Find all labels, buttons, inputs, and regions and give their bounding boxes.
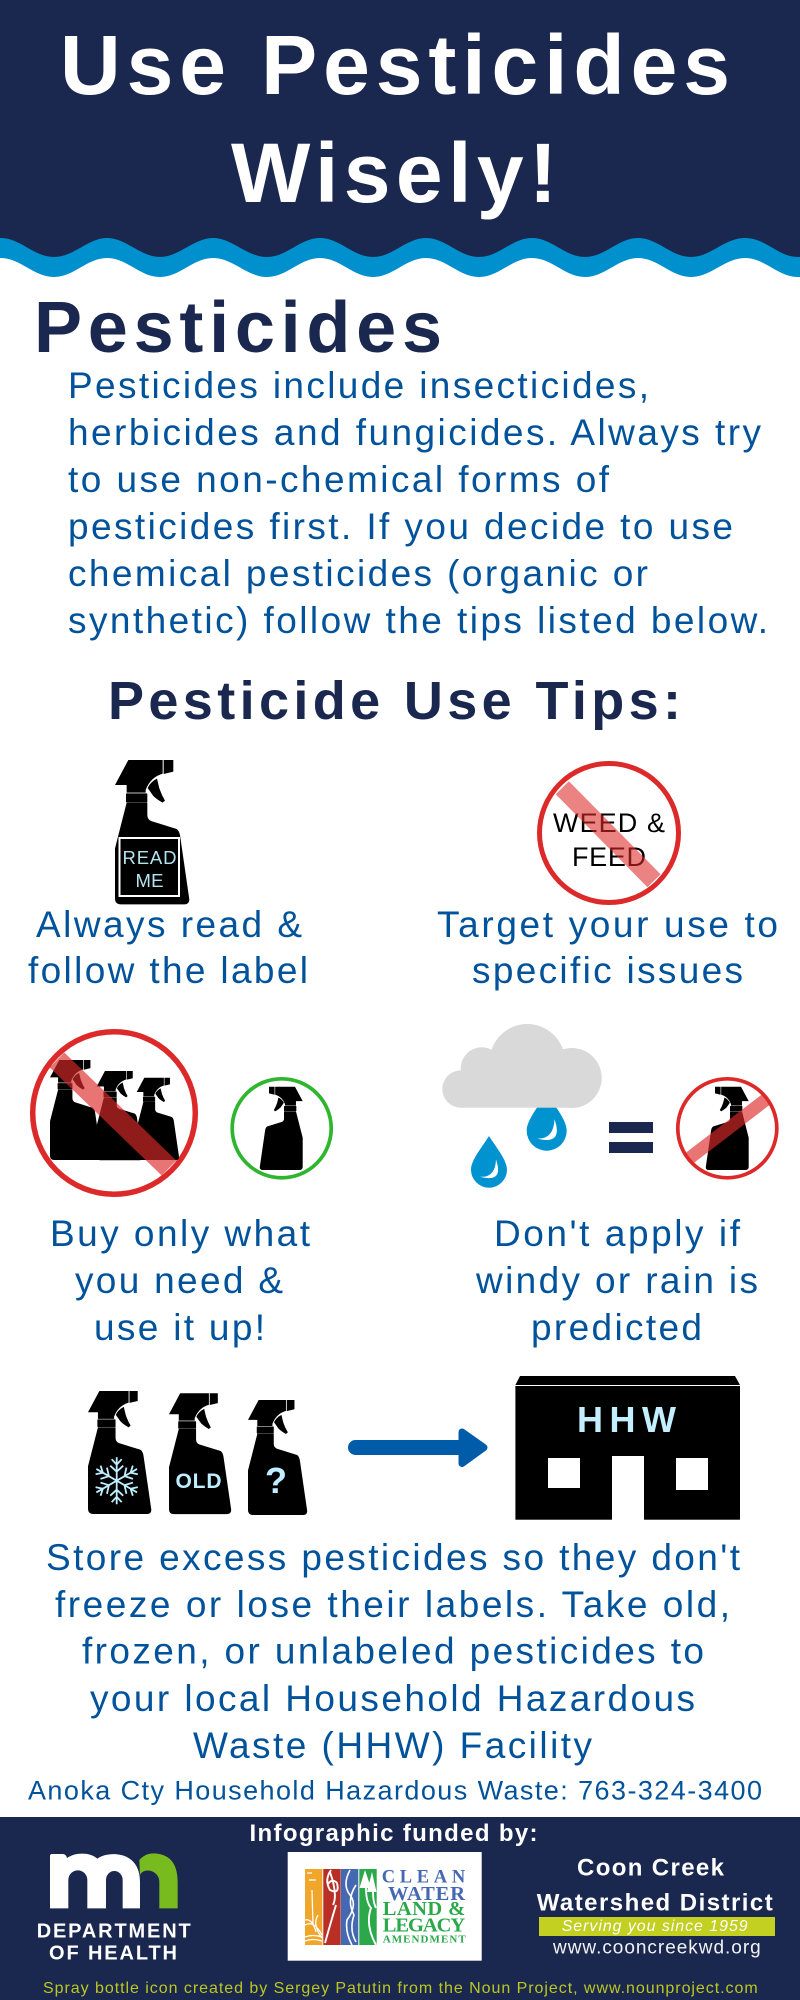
icon: old bottle	[169, 1393, 231, 1514]
intro paragraph: pesticides first. If you decide to use	[68, 506, 733, 547]
storage paragraph: Waste (HHW) Facility	[193, 1725, 592, 1766]
caption: you need &	[75, 1260, 283, 1301]
icon: rain cloud	[442, 1024, 602, 1188]
logo wordmark: WATER	[388, 1883, 465, 1905]
intro paragraph: herbicides and fungicides. Always try	[68, 412, 762, 453]
cloud shape	[442, 1024, 602, 1108]
tip 4: don't apply if windy or rainy	[442, 1024, 777, 1348]
icon: HHW building: HHW	[577, 1399, 676, 1440]
logo wordmark: LAND &	[383, 1898, 465, 1920]
Coon Creek Watershed District block: www.cooncreekwd.org	[552, 1937, 761, 1958]
caption: Target your use to	[437, 904, 778, 945]
phone line: Anoka Cty Household Hazardous Waste: 763-324-3400	[28, 1776, 762, 1806]
intro paragraph: Pesticides include insecticides,	[68, 365, 649, 406]
storage paragraph: freeze or lose their labels. Take old,	[55, 1584, 730, 1625]
caption: Don't apply if	[494, 1213, 741, 1254]
storage paragraph	[46, 1537, 741, 1766]
title: Wisely!	[231, 126, 557, 220]
icon: no bulk bottles	[33, 1032, 195, 1194]
logo stripes	[305, 1869, 377, 1945]
title: Use Pesticides	[60, 18, 730, 112]
logo wordmark: CLEAN	[382, 1868, 466, 1888]
logo: Clean Water Land and Legacy Amendment	[288, 1852, 482, 1961]
caption: Buy only what	[50, 1213, 311, 1254]
storage paragraph: your local Household Hazardous	[90, 1678, 695, 1719]
caption	[50, 1213, 311, 1348]
icon: equals sign	[609, 1122, 653, 1153]
icon: old bottle: OLD	[176, 1470, 222, 1493]
tip 2: target your use	[437, 764, 778, 991]
Coon Creek Watershed District block: Serving you since 1959	[562, 1918, 748, 1935]
arrow	[356, 1432, 484, 1464]
heading: Pesticide Use Tips: Pesticide Use Tips:	[108, 671, 681, 731]
caption: predicted	[531, 1307, 702, 1348]
Coon Creek Watershed District block: Watershed District	[537, 1890, 773, 1917]
Coon Creek Watershed District block	[537, 1855, 775, 1958]
icon: crossed out bottle	[678, 1079, 777, 1178]
logo: Minnesota Department of Health: OF HEALTH	[49, 1942, 177, 1964]
tip 3: buy only what you need	[33, 1032, 331, 1348]
icon: HHW building	[515, 1376, 740, 1520]
icon credit: Spray bottle icon created by Sergey Patutin from the Noun Project, www.nounproject.com	[43, 1980, 758, 1997]
logo wordmark: AMENDMENT	[383, 1933, 466, 1945]
icon: one bottle in green circle	[232, 1079, 331, 1178]
intro paragraph: to use non-chemical forms of	[68, 459, 610, 500]
intro paragraph: chemical pesticides (organic or	[68, 553, 648, 594]
icon: no weed and feed: WEED &	[553, 808, 665, 838]
intro paragraph	[68, 365, 768, 641]
icon: no weed and feed	[540, 764, 678, 902]
logo wordmark: LEGACY	[383, 1915, 465, 1937]
funded by heading: Infographic funded by:	[250, 1820, 538, 1847]
logo: Minnesota Department of Health: DEPARTMENT	[37, 1921, 191, 1943]
storage paragraph: Store excess pesticides so they don't	[46, 1537, 741, 1578]
title	[60, 18, 730, 220]
icon: spray bottle with READ ME label	[115, 760, 189, 904]
icon: spray bottle with READ ME label: ME	[136, 870, 164, 891]
intro paragraph: synthetic) follow the tips listed below.	[68, 600, 768, 641]
caption: windy or rain is	[475, 1260, 758, 1301]
storage and disposal graphic	[88, 1376, 740, 1520]
caption: use it up!	[94, 1307, 265, 1348]
tip 1: read the label	[28, 760, 308, 991]
footer panel	[0, 1817, 800, 2000]
caption	[437, 904, 778, 991]
icon: spray bottle with READ ME label: READ	[122, 847, 176, 868]
Coon Creek Watershed District block: Coon Creek	[577, 1855, 725, 1882]
icon: frozen bottle	[88, 1391, 151, 1514]
caption: follow the label	[28, 950, 308, 991]
icon: unlabeled bottle	[248, 1400, 307, 1515]
icon: unlabeled bottle: ?	[265, 1460, 287, 1501]
caption: specific issues	[472, 950, 743, 991]
caption	[475, 1213, 758, 1348]
wave band	[0, 238, 800, 277]
header banner	[0, 0, 800, 277]
caption	[28, 904, 308, 991]
icon: left rain drop	[471, 1136, 507, 1188]
icon: no weed and feed: FEED	[572, 842, 646, 872]
caption: Always read &	[36, 904, 302, 945]
icon: right rain drop	[527, 1093, 567, 1151]
logo wordmark	[382, 1868, 466, 1945]
logo: Minnesota Department of Health	[37, 1853, 191, 1964]
storage paragraph: frozen, or unlabeled pesticides to	[82, 1630, 704, 1672]
heading: Pesticides: Pesticides	[34, 288, 442, 368]
